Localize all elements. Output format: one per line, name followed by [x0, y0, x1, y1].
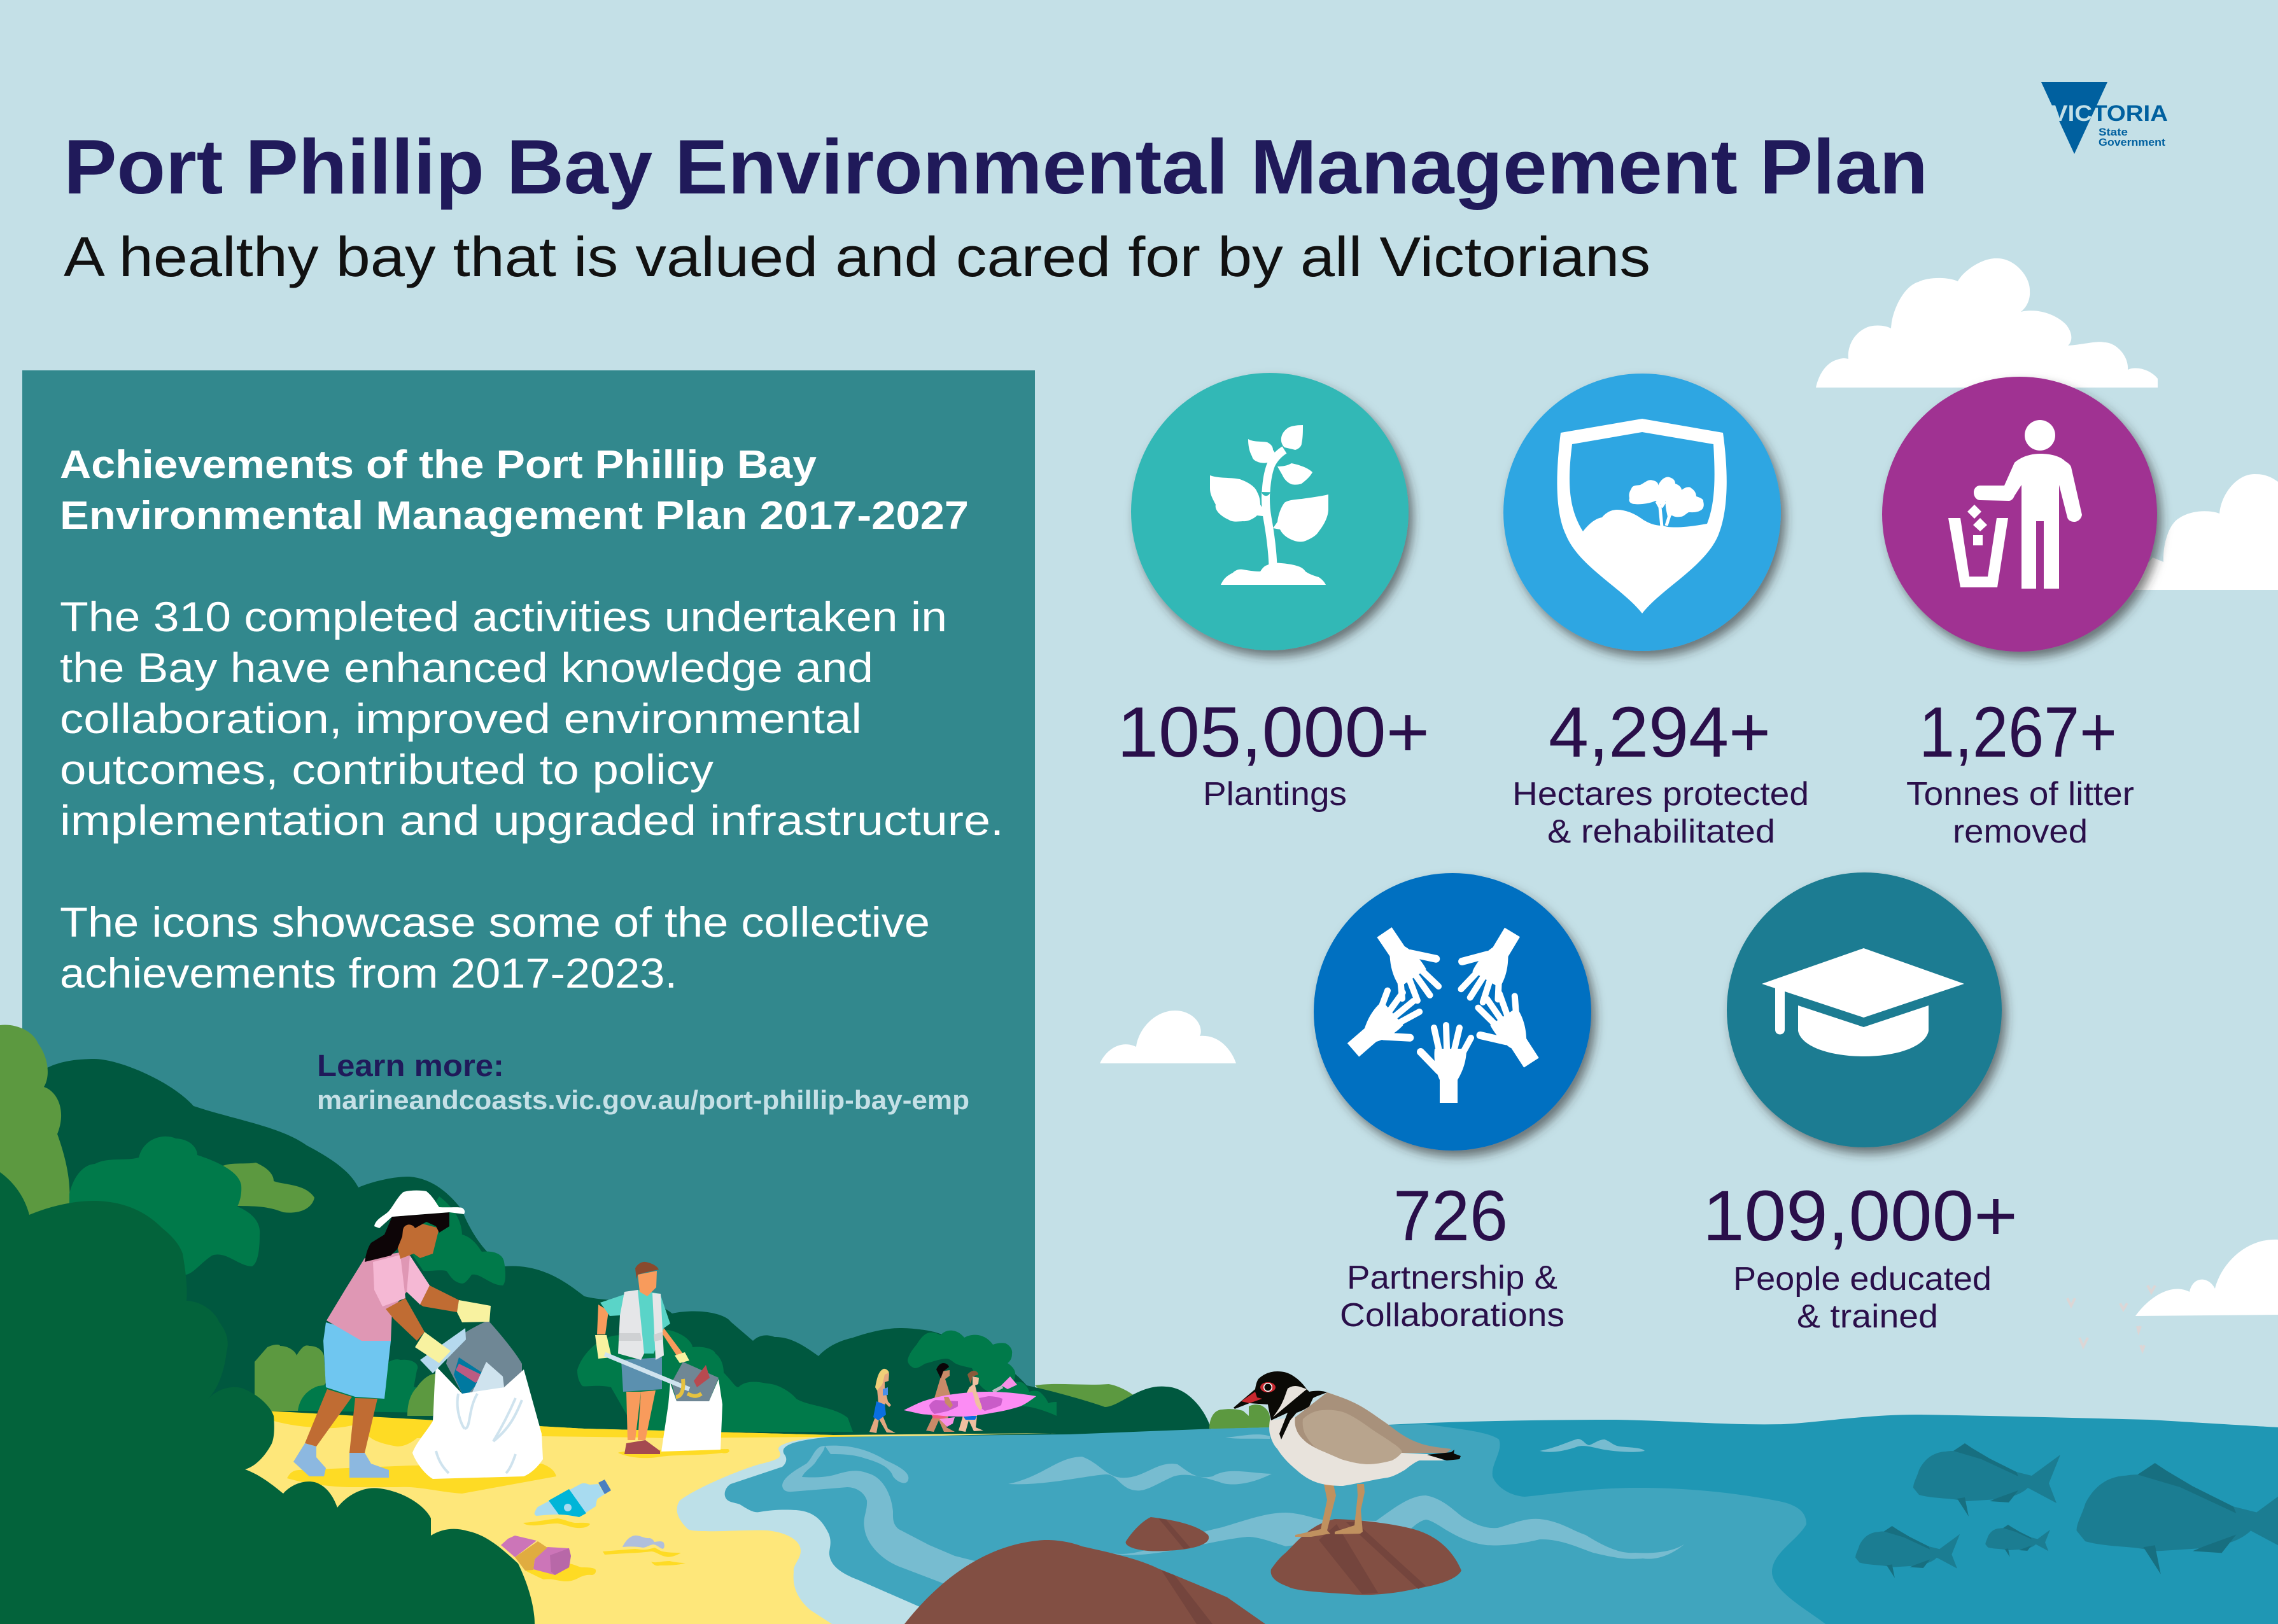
- cloud right lower: [2135, 1240, 2278, 1316]
- icon: graduation cap: [1727, 872, 2002, 1147]
- foreground bush: [0, 1172, 535, 1624]
- panel heading: Environmental Management Plan 2017-2027: [60, 494, 969, 538]
- title: Port Phillip Bay Environmental Management Plan: [64, 123, 1928, 210]
- logo: Victoria State Government: State: [2099, 126, 2128, 138]
- man collecting litter: [595, 1262, 722, 1454]
- hills behind beach: [0, 1025, 1270, 1439]
- water swirls: [782, 1434, 1685, 1588]
- sand beach: [191, 1411, 1057, 1624]
- sleeve: [373, 1255, 430, 1306]
- red bill: [1241, 1392, 1262, 1403]
- shirt: [600, 1290, 670, 1354]
- label: [1733, 1261, 1992, 1335]
- bottle in hand: [420, 1328, 466, 1373]
- legs and feet: [1295, 1484, 1365, 1537]
- arms over kayak: [944, 1397, 953, 1408]
- stat: litter: [1882, 377, 2157, 850]
- vest: [618, 1290, 664, 1360]
- label: People educated: [1733, 1261, 1992, 1298]
- stat: education: [1703, 872, 2018, 1335]
- bay water: [821, 1415, 2278, 1624]
- litter: paper scrap: [603, 1536, 686, 1566]
- logo: Victoria State Government: [2041, 82, 2168, 154]
- label: removed: [1953, 813, 2088, 850]
- panel body text: collaboration, improved environmental: [60, 695, 862, 742]
- label: Hectares protected: [1512, 776, 1809, 813]
- logo: Victoria State Government: VICTORIA: [2051, 101, 2168, 126]
- wing: [1303, 1410, 1402, 1464]
- learn more link: marineandcoasts.vic.gov.au/port-phillip-bay-emp: [317, 1085, 969, 1115]
- large rock: [904, 1540, 1265, 1624]
- distant birds: [2067, 1285, 2155, 1350]
- icon: plant: [1131, 373, 1409, 650]
- small rock: [1126, 1517, 1209, 1551]
- hooded plover on rock: [1234, 1371, 1461, 1537]
- label: Partnership &: [1347, 1259, 1557, 1296]
- label: Plantings: [1203, 776, 1347, 813]
- number: 4,294+: [1549, 692, 1771, 772]
- kayakers: [869, 1363, 1036, 1433]
- shorts: [621, 1357, 662, 1392]
- carrier one: [926, 1363, 955, 1432]
- panel body text: The 310 completed activities undertaken in: [60, 593, 947, 640]
- number: 726: [1393, 1176, 1508, 1256]
- number: 1,267+: [1919, 692, 2117, 772]
- legs: [626, 1390, 656, 1440]
- panel body text: The icons showcase some of the collective: [60, 899, 930, 946]
- foam edge: [677, 1437, 955, 1624]
- carrier two: [959, 1371, 983, 1432]
- arms: [386, 1285, 459, 1341]
- panel body text: implementation and upgraded infrastructure.: [60, 797, 1004, 844]
- head: [638, 1271, 657, 1296]
- gloves: [415, 1300, 491, 1363]
- pink kayak: [904, 1392, 1036, 1417]
- subtitle: A healthy bay that is valued and cared for by all Victorians: [64, 225, 1650, 288]
- shoes: [293, 1443, 389, 1478]
- arms: [597, 1305, 683, 1355]
- panel body text: outcomes, contributed to policy: [60, 746, 714, 793]
- shoes: [624, 1440, 660, 1454]
- label: Collaborations: [1340, 1297, 1564, 1334]
- shorts: [323, 1322, 391, 1399]
- learn more link: Learn more:: [317, 1049, 504, 1083]
- hair: [635, 1262, 659, 1279]
- paddle: [939, 1376, 1017, 1427]
- hair: [365, 1212, 449, 1262]
- legs: [305, 1389, 377, 1453]
- label: [1512, 776, 1809, 850]
- label: & rehabilitated: [1547, 813, 1775, 850]
- white body: [1269, 1417, 1445, 1486]
- banana peel: [676, 1379, 701, 1397]
- label: Tonnes of litter: [1906, 776, 2134, 813]
- black head and collar: [1234, 1371, 1327, 1439]
- panel body text: the Bay have enhanced knowledge and: [60, 644, 873, 691]
- cloud mid: [1100, 1011, 1236, 1063]
- panel heading: Achievements of the Port Phillip Bay: [60, 443, 817, 487]
- icon: five hands: [1314, 873, 1591, 1151]
- hat: [374, 1191, 465, 1228]
- centre rock: [1271, 1519, 1461, 1595]
- stat: hectares: [1503, 374, 1809, 850]
- learn more link: [317, 1049, 969, 1115]
- rubbish bag: [412, 1320, 543, 1479]
- cloud top: [1816, 258, 2158, 388]
- rocks: [904, 1517, 1461, 1624]
- shallow water near shore: [725, 1427, 1273, 1624]
- label: & trained: [1797, 1298, 1938, 1335]
- cloud right upper: [2126, 474, 2278, 590]
- stat: plantings: [1117, 373, 1430, 813]
- stat: partnerships: [1314, 873, 1591, 1334]
- gloves: [595, 1335, 689, 1363]
- bag: [671, 1362, 719, 1401]
- logo: Victoria State Government: Government: [2099, 136, 2165, 148]
- panel: achievements: [22, 370, 1035, 1452]
- white cheek: [1273, 1386, 1307, 1417]
- woman walking: [869, 1369, 896, 1433]
- fish shoal: [1855, 1443, 2278, 1578]
- number: 109,000+: [1703, 1176, 2018, 1256]
- woman collecting litter: [293, 1191, 543, 1479]
- vest band: [619, 1332, 663, 1341]
- shallow water: [821, 1424, 1825, 1624]
- shirt: [327, 1252, 430, 1341]
- panel body text: [60, 593, 1004, 997]
- icon: shield with tree: [1503, 374, 1781, 651]
- label: [1340, 1259, 1564, 1334]
- number: 105,000+: [1117, 692, 1430, 772]
- label: [1906, 776, 2134, 850]
- tail tip: [1427, 1450, 1461, 1460]
- grabber: [605, 1354, 689, 1389]
- litter: purple wrappers: [501, 1536, 596, 1581]
- panel heading: [60, 443, 969, 538]
- back: [1295, 1392, 1451, 1464]
- litter: plastic bottle: [523, 1480, 611, 1528]
- panel body text: achievements from 2017-2023.: [60, 949, 677, 997]
- face and neck: [396, 1219, 439, 1259]
- eye: [1260, 1382, 1276, 1392]
- icon: person with bin: [1882, 377, 2157, 652]
